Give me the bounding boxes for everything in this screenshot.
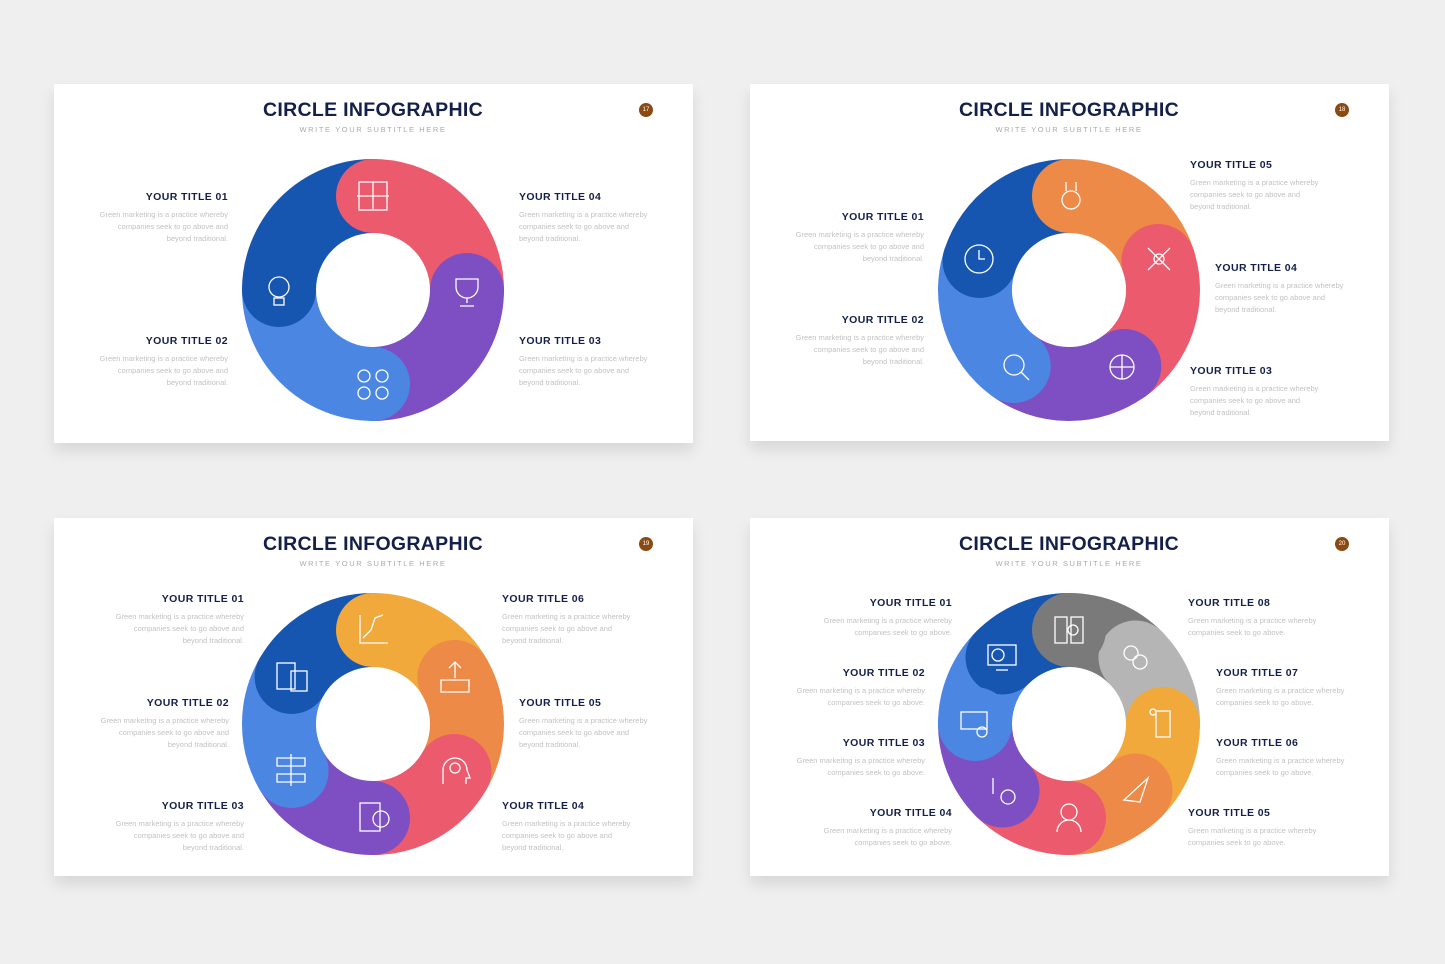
text: p4 title 05: Green marketing is a practice whereby <box>1188 826 1316 835</box>
text: p2 title 03: beyond traditional. <box>1190 408 1251 417</box>
text: p2 title 04 <box>1215 262 1344 314</box>
text: p3 title 02: Green marketing is a practice whereby <box>101 716 229 725</box>
donut chart 2 (5 segments) <box>938 159 1200 421</box>
text: p4 title 05: companies seek to go above. <box>1188 838 1286 847</box>
text: p4 title 02: companies seek to go above. <box>827 698 925 707</box>
text: p4 title 02 <box>797 667 925 707</box>
subtitle 3: WRITE YOUR SUBTITLE HERE <box>299 559 447 568</box>
text: p1 title 04: YOUR TITLE 04 <box>519 191 601 203</box>
text: p3 title 06: Green marketing is a practice whereby <box>502 612 630 621</box>
text: p3 title 06 <box>502 593 630 645</box>
text: p4 title 06: companies seek to go above. <box>1216 768 1314 777</box>
text: p4 title 02: Green marketing is a practice whereby <box>797 686 925 695</box>
text: p4 title 06: Green marketing is a practice whereby <box>1216 756 1344 765</box>
text: p4 title 05: YOUR TITLE 05 <box>1188 807 1270 819</box>
panel: slide 18 <box>750 84 1389 441</box>
donut chart 4 (8 segments) <box>936 591 1202 857</box>
text: p3 title 04: Green marketing is a practice whereby <box>502 819 630 828</box>
text: p4 title 08: YOUR TITLE 08 <box>1188 597 1270 609</box>
donut 2 icons <box>965 182 1170 380</box>
text: p1 title 03: YOUR TITLE 03 <box>519 335 601 347</box>
text: p2 title 05 <box>1190 159 1318 211</box>
panel: slide 19 <box>54 518 693 876</box>
text: p1 title 01: YOUR TITLE 01 <box>146 191 228 203</box>
text: p3 title 02: companies seek to go above and <box>119 728 229 737</box>
text: p3 title 01: Green marketing is a practice whereby <box>116 612 244 621</box>
text: p3 title 02: YOUR TITLE 02 <box>147 697 229 709</box>
text: p4 title 03: YOUR TITLE 03 <box>843 737 925 749</box>
text: p2 title 01 <box>796 211 924 263</box>
text: p2 title 05: YOUR TITLE 05 <box>1190 159 1272 171</box>
text: p2 title 03: YOUR TITLE 03 <box>1190 365 1272 377</box>
text: p1 title 02: Green marketing is a practice whereby <box>100 354 228 363</box>
panel: slide 17 <box>54 84 693 443</box>
text: p2 title 03: companies seek to go above and <box>1190 396 1300 405</box>
text: p4 title 07: YOUR TITLE 07 <box>1216 667 1298 679</box>
text: p3 title 02 <box>101 697 229 749</box>
donut 3 icons <box>277 615 470 831</box>
text: p3 title 04: beyond traditional. <box>502 843 563 852</box>
text: p4 title 07: Green marketing is a practice whereby <box>1216 686 1344 695</box>
text: p2 title 01: beyond traditional. <box>863 254 924 263</box>
text: p2 title 04: companies seek to go above and <box>1215 293 1325 302</box>
text: p3 title 03 <box>116 800 244 852</box>
text: p3 title 03: beyond traditional. <box>183 843 244 852</box>
badge 18: 18 <box>1339 107 1345 113</box>
text: p3 title 01: companies seek to go above and <box>134 624 244 633</box>
text: p4 title 08: companies seek to go above. <box>1188 628 1286 637</box>
badge 20: 20 <box>1339 541 1345 547</box>
badge 17: 17 <box>643 107 649 113</box>
text: p3 title 05: Green marketing is a practice whereby <box>519 716 647 725</box>
text: p4 title 07: companies seek to go above. <box>1216 698 1314 707</box>
text: p3 title 05 <box>519 697 648 749</box>
text: p1 title 02: companies seek to go above and <box>118 366 228 375</box>
text: p2 title 01: companies seek to go above and <box>814 242 924 251</box>
badge 17 <box>639 103 653 117</box>
text: p3 title 04: YOUR TITLE 04 <box>502 800 584 812</box>
text: p3 title 03: Green marketing is a practice whereby <box>116 819 244 828</box>
text: p2 title 02: YOUR TITLE 02 <box>842 314 924 326</box>
subtitle 4: WRITE YOUR SUBTITLE HERE <box>995 559 1143 568</box>
text: p3 title 01 <box>116 593 244 645</box>
text: p4 title 01: Green marketing is a practice whereby <box>824 616 952 625</box>
text: p3 title 06: beyond traditional. <box>502 636 563 645</box>
donut 1 icons <box>269 182 478 399</box>
text: p2 title 01: YOUR TITLE 01 <box>842 211 924 223</box>
subtitle 1: WRITE YOUR SUBTITLE HERE <box>299 125 447 134</box>
text: p4 title 03: Green marketing is a practice whereby <box>797 756 925 765</box>
text: p1 title 02: YOUR TITLE 02 <box>146 335 228 347</box>
badge 20 <box>1335 537 1349 551</box>
text: p1 title 04: companies seek to go above and <box>519 222 629 231</box>
text: p1 title 04: beyond traditional. <box>519 234 580 243</box>
text: p1 title 03 <box>519 335 648 387</box>
text: p2 title 03: Green marketing is a practice whereby <box>1190 384 1318 393</box>
text: p2 title 02: beyond traditional. <box>863 357 924 366</box>
text: p4 title 04: YOUR TITLE 04 <box>870 807 952 819</box>
text: p3 title 06: YOUR TITLE 06 <box>502 593 584 605</box>
badge 19: 19 <box>643 541 649 547</box>
text: p4 title 04 <box>824 807 952 847</box>
text: p3 title 04 <box>502 800 630 852</box>
badge 19 <box>639 537 653 551</box>
title 1: CIRCLE INFOGRAPHIC <box>263 99 483 121</box>
text: p4 title 03 <box>797 737 925 777</box>
badge 18 <box>1335 103 1349 117</box>
text: p1 title 04 <box>519 191 648 243</box>
text: p1 title 03: Green marketing is a practice whereby <box>519 354 647 363</box>
text: p3 title 01: beyond traditional. <box>183 636 244 645</box>
text: p4 title 04: companies seek to go above. <box>854 838 952 847</box>
text: p1 title 04: Green marketing is a practice whereby <box>519 210 647 219</box>
text: p3 title 04: companies seek to go above and <box>502 831 612 840</box>
text: p4 title 08 <box>1188 597 1316 637</box>
text: p2 title 04: beyond traditional. <box>1215 305 1276 314</box>
text: p1 title 03: companies seek to go above and <box>519 366 629 375</box>
text: p4 title 01 <box>824 597 952 637</box>
text: p4 title 01: YOUR TITLE 01 <box>870 597 952 609</box>
title 2: CIRCLE INFOGRAPHIC <box>959 99 1179 121</box>
text: p4 title 02: YOUR TITLE 02 <box>843 667 925 679</box>
text: p1 title 01: companies seek to go above and <box>118 222 228 231</box>
donut 4 icons <box>961 617 1170 832</box>
text: p4 title 01: companies seek to go above. <box>854 628 952 637</box>
text: p2 title 05: beyond traditional. <box>1190 202 1251 211</box>
text: p1 title 02 <box>100 335 228 387</box>
text: p3 title 05: companies seek to go above and <box>519 728 629 737</box>
subtitle 2: WRITE YOUR SUBTITLE HERE <box>995 125 1143 134</box>
donut chart 3 (6 segments) <box>245 593 501 855</box>
text: p3 title 06: companies seek to go above and <box>502 624 612 633</box>
text: p4 title 03: companies seek to go above. <box>827 768 925 777</box>
text: p3 title 05: beyond traditional. <box>519 740 580 749</box>
text: p2 title 01: Green marketing is a practice whereby <box>796 230 924 239</box>
text: p2 title 04: Green marketing is a practice whereby <box>1215 281 1343 290</box>
text: p1 title 03: beyond traditional. <box>519 378 580 387</box>
text: p3 title 02: beyond traditional. <box>168 740 229 749</box>
text: p4 title 08: Green marketing is a practice whereby <box>1188 616 1316 625</box>
text: p4 title 05 <box>1188 807 1316 847</box>
text: p2 title 02: Green marketing is a practice whereby <box>796 333 924 342</box>
text: p4 title 06 <box>1216 737 1344 777</box>
text: p2 title 02: companies seek to go above and <box>814 345 924 354</box>
text: p3 title 03: YOUR TITLE 03 <box>162 800 244 812</box>
panel: slide 20 <box>750 518 1389 876</box>
text: p2 title 05: companies seek to go above and <box>1190 190 1300 199</box>
donut chart 1 (4 segments) <box>242 159 504 421</box>
text: p4 title 04: Green marketing is a practice whereby <box>824 826 952 835</box>
text: p4 title 06: YOUR TITLE 06 <box>1216 737 1298 749</box>
text: p2 title 04: YOUR TITLE 04 <box>1215 262 1297 274</box>
title 3: CIRCLE INFOGRAPHIC <box>263 533 483 555</box>
text: p2 title 03 <box>1190 365 1318 417</box>
text: p1 title 02: beyond traditional. <box>167 378 228 387</box>
title 4: CIRCLE INFOGRAPHIC <box>959 533 1179 555</box>
text: p1 title 01: Green marketing is a practice whereby <box>100 210 228 219</box>
text: p1 title 01: beyond traditional. <box>167 234 228 243</box>
text: p3 title 05: YOUR TITLE 05 <box>519 697 601 709</box>
text: p4 title 07 <box>1216 667 1344 707</box>
text: p1 title 01 <box>100 191 228 243</box>
text: p3 title 01: YOUR TITLE 01 <box>162 593 244 605</box>
text: p2 title 02 <box>796 314 924 366</box>
text: p2 title 05: Green marketing is a practice whereby <box>1190 178 1318 187</box>
text: p3 title 03: companies seek to go above and <box>134 831 244 840</box>
